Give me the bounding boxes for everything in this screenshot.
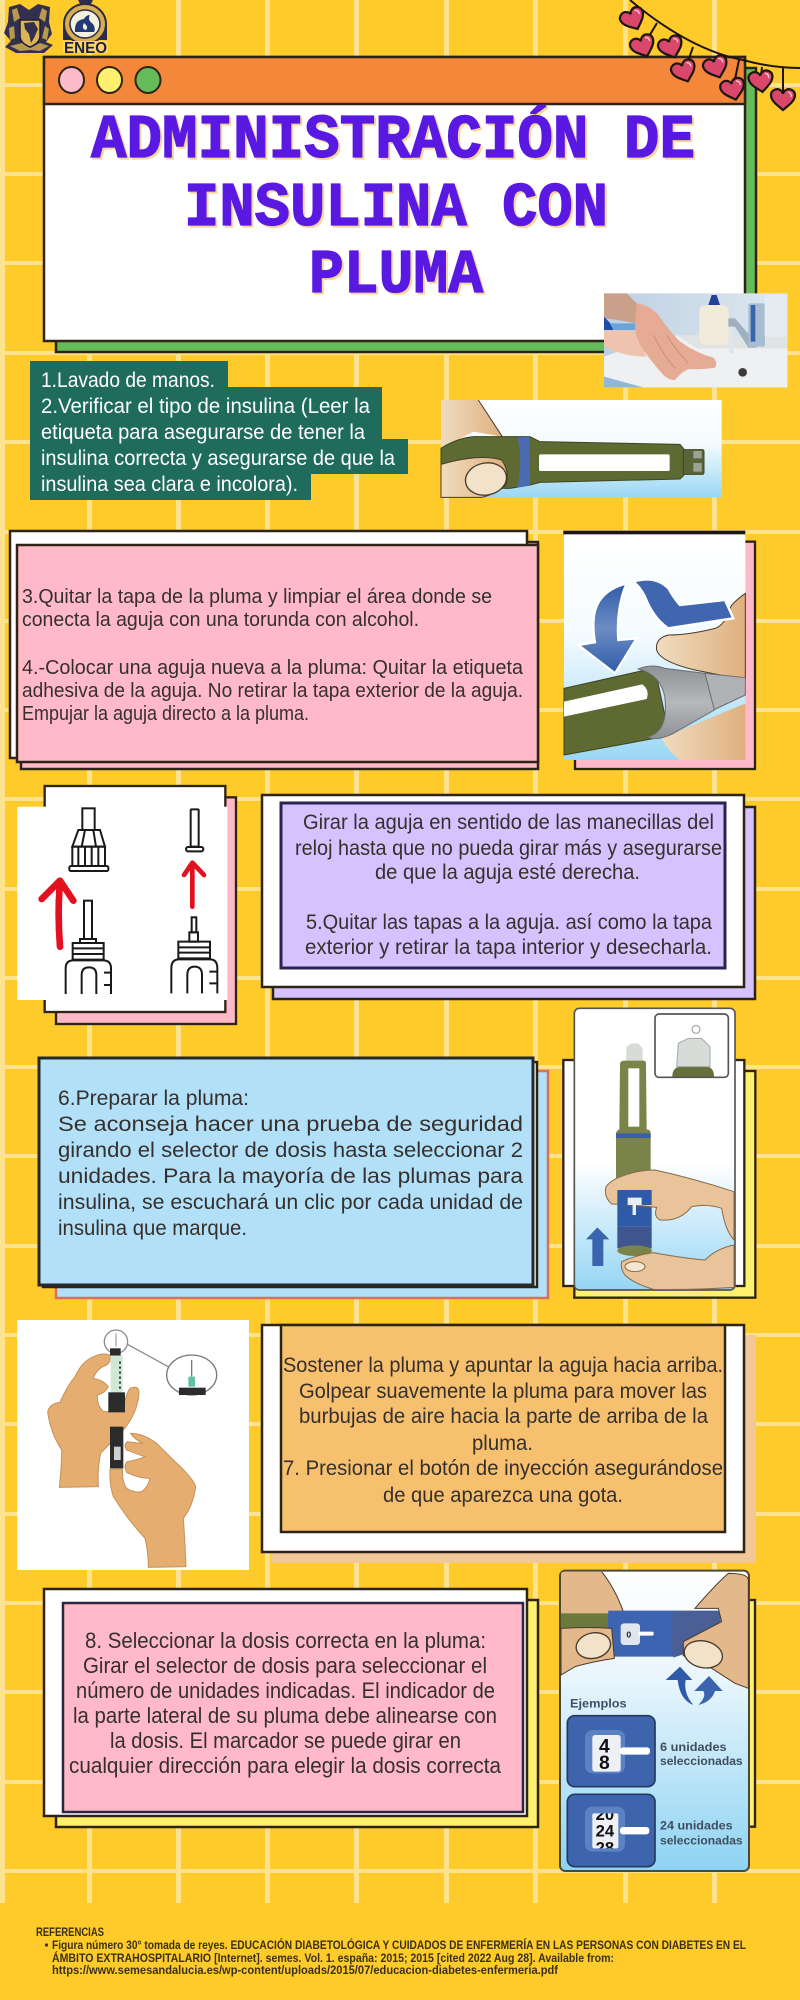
step text: reloj hasta que no pueda girar más y asegurarse: [295, 836, 722, 860]
step text: [58, 1086, 523, 1240]
image: dose selection: [560, 1571, 755, 1871]
step text: pluma.: [472, 1431, 533, 1455]
icon: UNAM crest: [4, 4, 53, 53]
step text: conecta la aguja con una torunda con alcohol.: [22, 609, 419, 631]
pink card: [63, 1603, 523, 1812]
text block: steps 1 and 2: 2.Verificar el tipo de insulina (Leer la: [41, 394, 370, 418]
white layer: [262, 1325, 744, 1552]
step text: insulina, se escuchará un clic por cada unidad de: [58, 1190, 523, 1214]
text block: steps 1 and 2: insulina correcta y asegurarse de que la: [41, 446, 395, 470]
icon: ENEO logo: [63, 0, 108, 57]
step text: girando el selector de dosis hasta seleccionar 2: [58, 1138, 523, 1162]
references: ÁMBITO EXTRAHOSPITALARIO [Internet]. semes. Vol. 1. españa: 2015; 2015 [cited 2022 Aug 28]. Available from:: [52, 1952, 614, 1965]
image: hand washing: [604, 293, 787, 387]
step text: Sostener la pluma y apuntar la aguja hacia arriba.: [283, 1353, 723, 1377]
icon: ENEO logo: ENEO: [64, 40, 107, 57]
panel: steps 3 and 4: [10, 531, 538, 769]
title: PLUMA: [309, 240, 484, 311]
step text: [22, 586, 524, 725]
panel: step 7: [262, 1325, 756, 1563]
references: https://www.semesandalucia.es/wp-content/uploads/2015/07/educacion-diabetes-enfermeria.pdf: [52, 1965, 558, 1977]
orange card: [281, 1325, 725, 1532]
step text: Empujar la aguja directo a la pluma.: [22, 703, 309, 725]
panel: step 8: [44, 1589, 538, 1827]
image: dose selection: seleccionadas: [660, 1754, 743, 1768]
image: dose selection: 8: [599, 1753, 610, 1774]
image: dose selection: 0: [626, 1630, 631, 1640]
pink card: [17, 545, 538, 762]
white layer: [43, 1062, 537, 1287]
back layer: [56, 1600, 538, 1827]
panel: title window: [44, 57, 756, 352]
step text: [69, 1628, 501, 1778]
text block: steps 1 and 2: [30, 361, 408, 500]
image: dose selection: 24 unidades: [660, 1818, 733, 1832]
step text: burbujas de aire hacia la parte de arriba de la: [299, 1404, 708, 1428]
back layer: [21, 542, 538, 769]
step text: 7. Presionar el botón de inyección asegurándose: [283, 1456, 723, 1480]
step text: Se aconseja hacer una prueba de seguridad: [58, 1112, 523, 1136]
white layer: [44, 1589, 527, 1816]
step text: de que aparezca una gota.: [383, 1483, 623, 1507]
panel: step 5: [262, 795, 755, 999]
step text: unidades. Para la mayoría de las plumas para: [58, 1164, 523, 1188]
image: needle attaching pen: [563, 531, 755, 769]
white layer: [262, 795, 744, 987]
step text: 4.-Colocar una aguja nueva a la pluma: Quitar la etiqueta: [22, 657, 524, 679]
image: dose selection: 20: [596, 1805, 614, 1824]
title: [91, 105, 695, 311]
image: dose selection: Ejemplos: [570, 1696, 627, 1710]
image: dose selection: 6 unidades: [660, 1740, 727, 1754]
step text: Girar la aguja en sentido de las manecillas del: [303, 810, 714, 834]
image: pen priming: [563, 1008, 755, 1298]
step text: Girar el selector de dosis para seleccionar el: [83, 1653, 487, 1678]
references: [36, 1927, 746, 1977]
step text: [283, 1353, 723, 1507]
icon: heart garland: [618, 0, 800, 110]
image: dose selection: 24: [596, 1821, 615, 1840]
window body: [44, 57, 745, 341]
purple card: [281, 803, 725, 968]
step text: [295, 810, 722, 959]
references: REFERENCIAS: [36, 1927, 104, 1939]
step text: 3.Quitar la tapa de la pluma y limpiar el área donde se: [22, 586, 492, 608]
image: needle caps removal: [17, 786, 236, 1024]
step text: adhesiva de la aguja. No retirar la tapa exterior de la aguja.: [22, 680, 523, 702]
white layer: [10, 531, 527, 758]
step text: número de unidades indicadas. El indicador de: [76, 1678, 495, 1703]
step text: 8. Seleccionar la dosis correcta en la pluma:: [85, 1628, 486, 1653]
text block: steps 1 and 2: insulina sea clara e incolora).: [41, 472, 298, 496]
step text: de que la aguja esté derecha.: [375, 860, 640, 884]
title: ADMINISTRACIÓN DE: [91, 105, 695, 176]
step text: la dosis. El marcador se puede girar en: [110, 1728, 461, 1753]
window shadow: [56, 68, 756, 352]
step text: 5.Quitar las tapas a la aguja. así como la tapa: [306, 910, 712, 934]
image: dose selection: seleccionadas: [660, 1833, 743, 1847]
image: dose selection: 28: [596, 1838, 614, 1857]
image: hands tapping pen: [17, 1320, 249, 1570]
step text: 6.Preparar la pluma:: [58, 1086, 249, 1110]
step text: exterior y retirar la tapa interior y desecharla.: [305, 935, 712, 959]
back layer: [273, 807, 755, 999]
window header bar: [44, 57, 745, 104]
image: insulin pen check: [441, 400, 722, 498]
text block: steps 1 and 2: etiqueta para asegurarse de tener la: [41, 420, 365, 444]
back layer: [56, 1071, 548, 1298]
text block: steps 1 and 2: 1.Lavado de manos.: [41, 368, 215, 392]
step text: Golpear suavemente la pluma para mover las: [299, 1379, 707, 1403]
title: INSULINA CON: [184, 173, 608, 244]
step text: la parte lateral de su pluma debe alinearse con: [73, 1703, 497, 1728]
image: dose selection: 4: [599, 1737, 610, 1758]
step text: cualquier dirección para elegir la dosis correcta: [69, 1753, 501, 1778]
blue card: [39, 1058, 533, 1285]
panel: step 6: [39, 1058, 548, 1298]
step text: insulina que marque.: [58, 1216, 247, 1240]
window dots: [59, 67, 160, 93]
back layer: [271, 1335, 756, 1563]
